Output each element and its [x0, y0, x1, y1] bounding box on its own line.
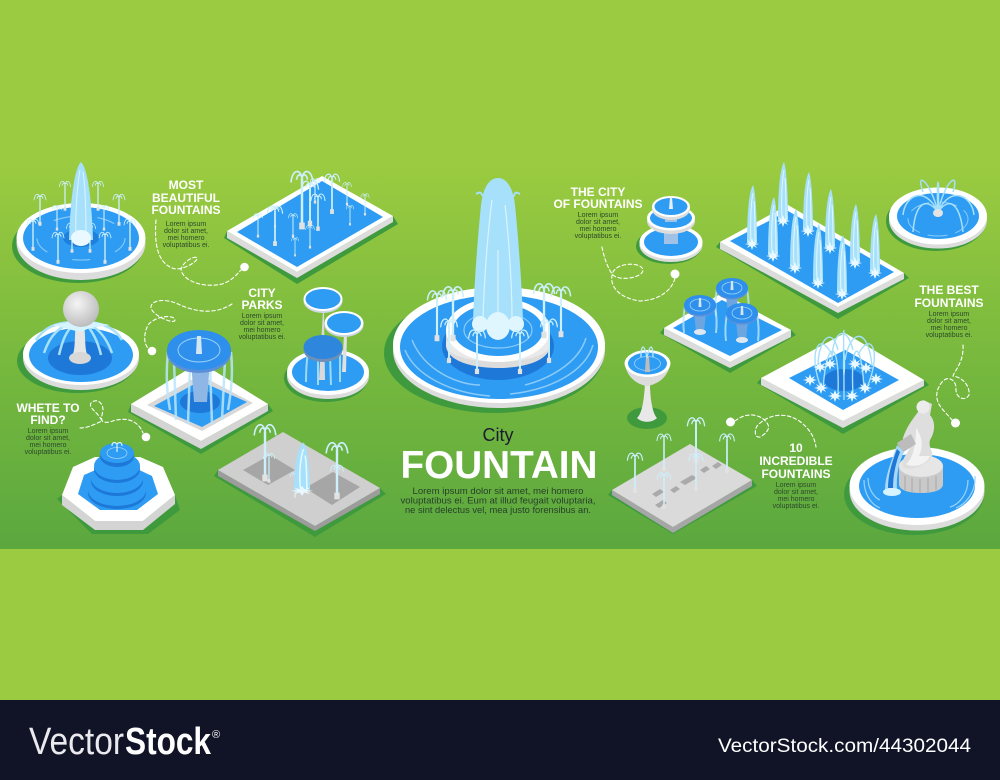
heading: the city of fountains: THE CITY: [571, 185, 625, 199]
fountain: rectangular pool with small jets: [224, 172, 398, 284]
heading: where to find: WHETE TO: [16, 401, 80, 415]
fountain: round with many jets: [12, 162, 146, 283]
heading: city parks: mei homero: [244, 327, 281, 334]
heading: the best fountains: voluptatibus ei.: [926, 332, 972, 339]
footer image id: VectorStock.com/44302044: [718, 736, 971, 757]
dashed connector 6: [726, 415, 816, 447]
heading: the city of fountains: OF FOUNTAINS: [553, 197, 643, 211]
footer logo: [29, 721, 220, 763]
fountain: octagon with tiered dome: [57, 443, 180, 534]
title block: FOUNTAIN: [400, 444, 598, 487]
title block: [400, 425, 598, 515]
heading: the best fountains: Lorem ipsum: [929, 311, 969, 318]
footer logo: Stock: [125, 721, 212, 763]
heading: most beautiful fountains: voluptatibus ei.: [163, 242, 209, 249]
heading: most beautiful fountains: FOUNTAINS: [151, 203, 221, 217]
heading: city parks: Lorem ipsum: [242, 313, 282, 320]
heading: city parks: dolor sit amet,: [240, 320, 284, 327]
heading: most beautiful fountains: dolor sit amet,: [164, 228, 208, 235]
heading: the city of fountains: mei homero: [580, 226, 617, 233]
heading: 10 incredible fountains: Lorem ipsum: [776, 482, 816, 489]
fountain: pedestal bowl: [624, 347, 670, 429]
title block: voluptatibus ei. Eum at illud feugait voluptaria,: [400, 496, 596, 506]
fountain: statue with jug: [844, 400, 984, 535]
dashed connector 3: [80, 401, 150, 441]
title block: City: [482, 425, 514, 445]
heading: where to find: mei homero: [30, 442, 67, 449]
heading: city parks: voluptatibus ei.: [239, 334, 285, 341]
heading: the best fountains: [914, 283, 984, 339]
heading: most beautiful fountains: [151, 178, 221, 249]
heading: most beautiful fountains: BEAUTIFUL: [152, 191, 220, 205]
fountain: square with arching jets: [757, 330, 929, 434]
title block: ne sint delectus vel, mea justo forensibus an.: [405, 505, 591, 515]
heading: city parks: [239, 286, 285, 341]
heading: where to find: dolor sit amet,: [26, 435, 70, 442]
footer logo: ®: [212, 729, 220, 741]
fountain: rectangular pool with tall jets: [716, 162, 909, 319]
fountain: bowl on square pool: [128, 330, 273, 454]
heading: the city of fountains: dolor sit amet,: [576, 219, 620, 226]
title block: Lorem ipsum dolor sit amet, mei homero: [412, 486, 584, 496]
green gradient infographic panel: [0, 165, 1000, 549]
heading: the best fountains: FOUNTAINS: [914, 296, 984, 310]
heading: most beautiful fountains: mei homero: [168, 235, 205, 242]
heading: most beautiful fountains: MOST: [169, 178, 204, 192]
dashed connector 5: [937, 345, 969, 428]
fountain: square with three bowls: [660, 278, 796, 373]
fountain: three tier: [636, 196, 702, 264]
fountain: ring with arched jets: [886, 180, 987, 251]
heading: the city of fountains: [553, 185, 643, 240]
fountain: paved square with jets: [608, 418, 757, 534]
heading: most beautiful fountains: Lorem ipsum: [166, 221, 206, 228]
heading: the best fountains: mei homero: [931, 325, 968, 332]
dashed connector 1: [156, 220, 249, 285]
fountain: sphere with spray: [17, 291, 139, 393]
heading: where to find: [16, 401, 80, 456]
heading: the city of fountains: voluptatibus ei.: [575, 233, 621, 240]
heading: 10 incredible fountains: dolor sit amet,: [774, 489, 818, 496]
heading: 10 incredible fountains: FOUNTAINS: [761, 467, 831, 481]
footer bar: [0, 700, 1000, 780]
heading: the best fountains: dolor sit amet,: [927, 318, 971, 325]
heading: where to find: Lorem ipsum: [28, 428, 68, 435]
heading: 10 incredible fountains: 10: [789, 441, 803, 455]
fountain: main central: [384, 178, 605, 413]
fountain: grey plaza: [214, 425, 386, 537]
fountain: three raised dishes: [284, 287, 369, 402]
heading: 10 incredible fountains: mei homero: [778, 496, 815, 503]
heading: 10 incredible fountains: [759, 441, 833, 510]
heading: city parks: CITY: [248, 286, 276, 300]
dashed connector 2: [145, 301, 232, 355]
heading: where to find: voluptatibus ei.: [25, 449, 71, 456]
heading: 10 incredible fountains: voluptatibus ei.: [773, 503, 819, 510]
heading: the best fountains: THE BEST: [919, 283, 979, 297]
heading: where to find: FIND?: [30, 413, 66, 427]
dashed connector 4: [602, 247, 680, 301]
heading: the city of fountains: Lorem ipsum: [578, 212, 618, 219]
footer logo: Vector: [29, 721, 124, 763]
heading: city parks: PARKS: [241, 298, 283, 312]
heading: 10 incredible fountains: INCREDIBLE: [759, 454, 833, 468]
